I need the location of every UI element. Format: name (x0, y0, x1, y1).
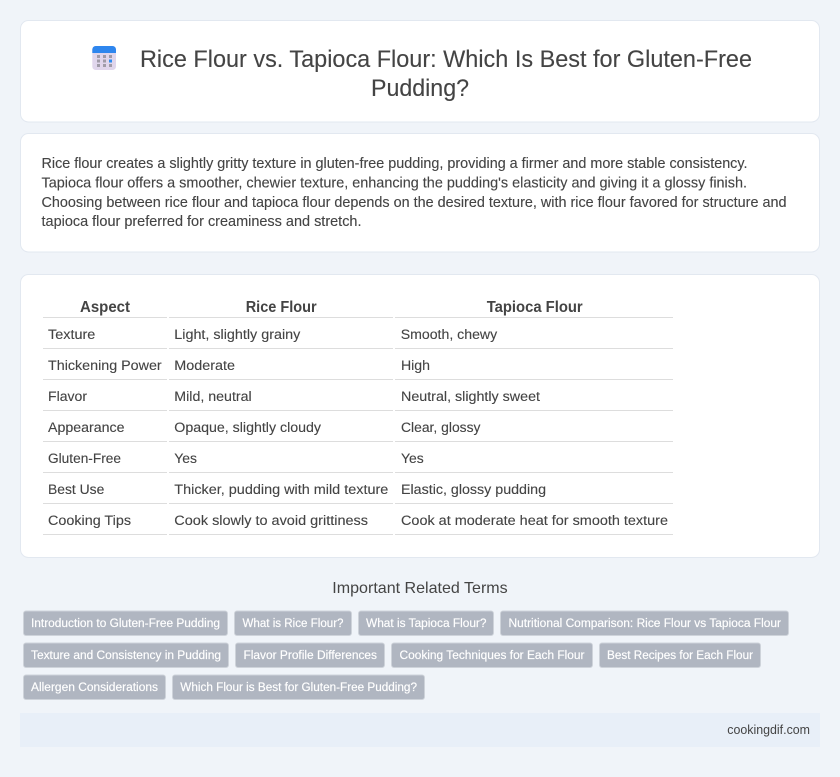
row: best use: Best Use (48, 482, 104, 498)
tag (392, 643, 592, 668)
row: appearance: Opaque, slightly cloudy (174, 420, 322, 436)
row: cooking tips (48, 513, 668, 529)
row: gluten-free: Yes (174, 451, 197, 467)
tag: Allergen Considerations (31, 680, 158, 694)
row: thickening power (48, 358, 430, 374)
table header: Aspect (80, 299, 131, 316)
icon: calendar (92, 46, 116, 70)
tag (358, 611, 494, 636)
tag (24, 643, 228, 668)
row: best use: Elastic, glossy pudding (401, 482, 546, 498)
tag: Cooking Techniques for Each Flour (400, 648, 584, 662)
tag: Which Flour is Best for Gluten-Free Pudding? (180, 680, 417, 694)
row: gluten-free: Gluten-Free (48, 451, 121, 467)
title: Rice Flour vs. Tapioca Flour: Which Is Best for Gluten-Free (140, 46, 752, 73)
tag: What is Tapioca Flour? (366, 616, 487, 630)
text block: summary: Tapioca flour offers a smoother, chewier texture, enhancing the pudding's elasticity and giving it a glossy finish. (42, 176, 747, 192)
tag (24, 611, 228, 636)
table header: Rice Flour (246, 299, 317, 316)
heading: important related terms: Important Related Terms (332, 580, 508, 597)
text block: summary (42, 156, 786, 230)
row: cooking tips: Cooking Tips (48, 513, 131, 529)
row: gluten-free: Yes (401, 451, 424, 467)
tag: Texture and Consistency in Pudding (31, 648, 221, 662)
row: texture: Texture (48, 327, 95, 343)
row: flavor: Flavor (48, 389, 87, 405)
row: thickening power: High (401, 358, 430, 374)
row: thickening power: Moderate (174, 358, 235, 374)
row: gluten-free (48, 451, 424, 467)
row: cooking tips: Cook slowly to avoid grittiness (174, 513, 368, 529)
tag (172, 675, 424, 700)
tag: Introduction to Gluten-Free Pudding (31, 616, 220, 630)
table header (80, 299, 583, 316)
row: thickening power: Thickening Power (48, 358, 162, 374)
tag: Best Recipes for Each Flour (607, 648, 753, 662)
tag (500, 611, 788, 636)
panel: comparison table (20, 274, 820, 558)
row: flavor (48, 389, 540, 405)
row: flavor: Mild, neutral (174, 389, 252, 405)
panel: intro paragraph (20, 134, 820, 252)
row: texture (48, 327, 498, 343)
tag (600, 643, 760, 668)
row: flavor: Neutral, slightly sweet (401, 389, 540, 405)
row: best use: Thicker, pudding with mild texture (174, 482, 388, 498)
related term tags (24, 611, 788, 700)
row: best use (48, 482, 546, 498)
tag: Nutritional Comparison: Rice Flour vs Tapioca Flour (508, 616, 781, 630)
row: texture: Light, slightly grainy (174, 327, 301, 343)
tag: What is Rice Flour? (242, 616, 344, 630)
text block: summary: Rice flour creates a slightly gritty texture in gluten-free pudding, providing a firmer and more stable consistency. (42, 156, 748, 172)
tag (24, 675, 166, 700)
row: cooking tips: Cook at moderate heat for smooth texture (401, 513, 668, 529)
row: appearance: Clear, glossy (401, 420, 481, 436)
tag (234, 611, 352, 636)
tag (236, 643, 384, 668)
text block: summary: tapioca flour preferred for creaminess and stretch. (42, 214, 361, 230)
row: appearance (48, 420, 481, 436)
title (140, 46, 752, 102)
footer bar (20, 713, 820, 747)
tag: Flavor Profile Differences (244, 648, 377, 662)
row: texture: Smooth, chewy (401, 327, 498, 343)
footer source text: cookingdif.com (727, 722, 810, 737)
text block: summary: Choosing between rice flour and tapioca flour depends on the desired texture, with rice flour favored for structure and (42, 195, 786, 211)
row: appearance: Appearance (48, 420, 125, 436)
table header: Tapioca Flour (487, 299, 583, 316)
panel: header (20, 20, 820, 122)
title: Pudding? (371, 75, 469, 102)
